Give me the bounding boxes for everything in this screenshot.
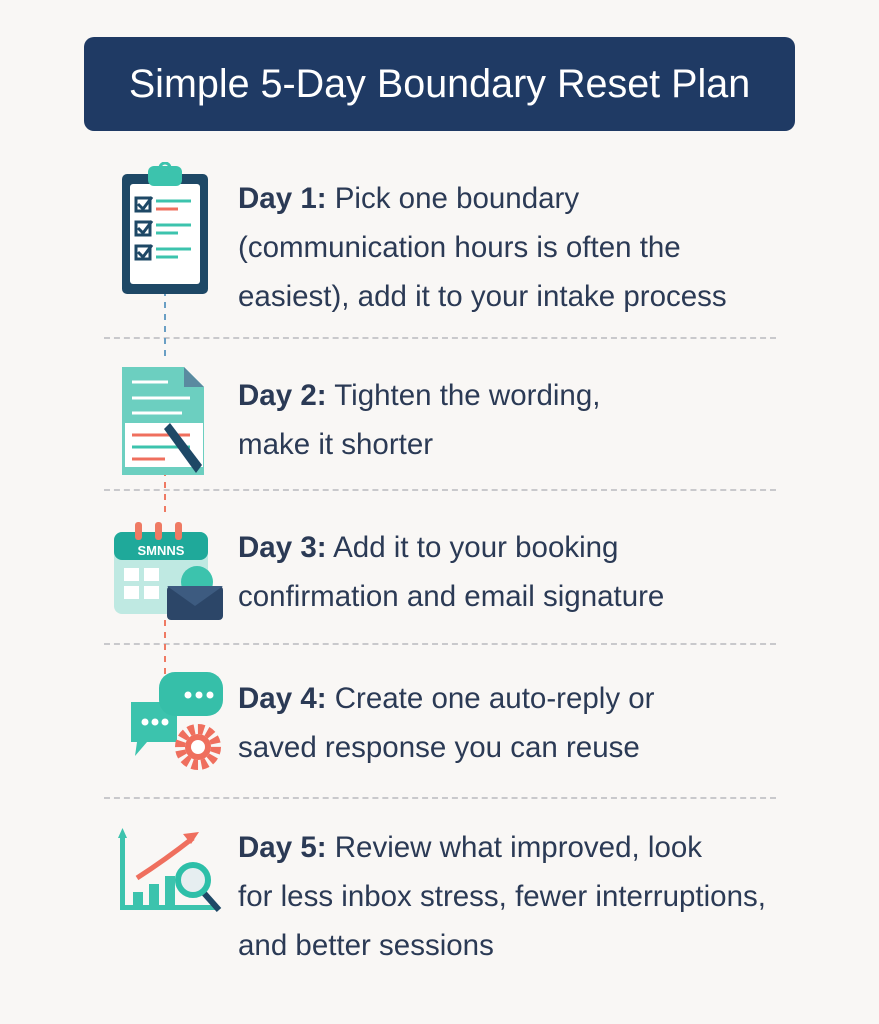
step: day 1 [238,182,727,313]
icon: clipboard [122,162,208,294]
title: Simple 5-Day Boundary Reset Plan [129,62,750,106]
step: day 1: (communication hours is often the [238,231,681,264]
step: day 5: Day 5: Review what improved, look [238,831,702,864]
step: day 4 [238,682,655,764]
step: day 2 [238,379,600,461]
step: day 4: Day 4: Create one auto-reply or [238,682,655,715]
step: day 3 [238,531,664,613]
step: day 5: for less inbox stress, fewer interruptions, [238,880,766,913]
step: day 4: saved response you can reuse [238,731,640,764]
icon: growth chart with magnifier [118,828,222,912]
icon: calendar and envelope: SMNNS [138,543,185,558]
step: day 5 [238,831,766,962]
icon: chat bubbles and gear [131,672,223,770]
icon: calendar and envelope [114,522,223,620]
step: day 3: confirmation and email signature [238,580,664,613]
step: day 2: make it shorter [238,428,433,461]
step: day 1: Day 1: Pick one boundary [238,182,579,215]
title [84,37,795,131]
step: day 1: easiest), add it to your intake process [238,280,727,313]
step: day 3: Day 3: Add it to your booking [238,531,618,564]
connector lines [164,294,166,674]
step: day 5: and better sessions [238,929,494,962]
icon: document with pen [122,367,204,475]
step: day 2: Day 2: Tighten the wording, [238,379,600,412]
